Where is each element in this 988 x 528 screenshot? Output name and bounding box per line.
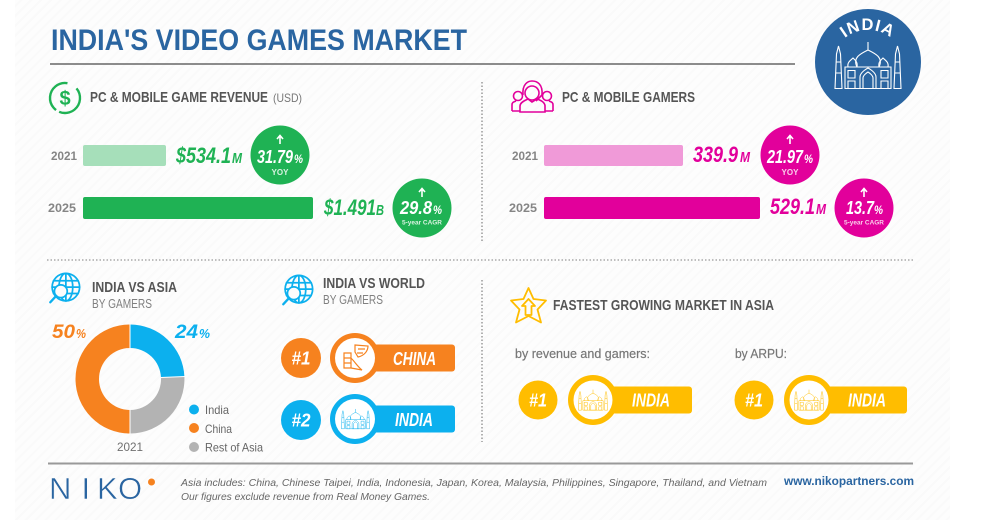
- footer: [49, 471, 914, 506]
- growth circle: 21.97% YoY: %: [804, 152, 813, 166]
- Asia heading: BY GAMERS: [92, 297, 152, 311]
- gamers heading: PC & MOBILE GAMERS: [562, 89, 695, 106]
- gamers 2025 row: M: [816, 201, 826, 218]
- growth circle: 13.7% CAGR: 13.7: [846, 198, 875, 218]
- gamers 2021 row: 2021: [512, 149, 538, 163]
- icon: Taj Mahal: [578, 390, 608, 410]
- growth circle: 31.79% YoY: [250, 126, 310, 184]
- revenue 2025 row: B: [376, 202, 384, 219]
- icon: Taj Mahal: [835, 42, 901, 88]
- rank: #1: #1: [292, 348, 310, 368]
- growth circle: 31.79% YoY: 31.79: [257, 147, 293, 167]
- revenue heading: (USD): [273, 91, 302, 105]
- revenue 2021 row: M: [232, 150, 242, 167]
- World heading: BY GAMERS: [323, 293, 383, 307]
- growth circle: 29.8% CAGR: 5-year CAGR: [402, 220, 442, 226]
- panel: fastest growing: [511, 288, 907, 425]
- logo: NIKO: [49, 471, 142, 506]
- subhead: ARPU: by ARPU:: [735, 346, 787, 361]
- revenue 2021 row: 2021: [51, 149, 77, 163]
- icon: globe: [50, 273, 80, 302]
- panel: India vs World: [281, 275, 455, 444]
- label: 24%: %: [199, 326, 210, 341]
- icon: gamers: [512, 81, 553, 112]
- rank: #1: [281, 338, 321, 378]
- pill: India by ARPU: INDIA: [848, 390, 886, 410]
- gamers 2021 row: [512, 142, 750, 167]
- legend: [189, 403, 263, 454]
- revenue 2021 row: [51, 143, 242, 168]
- donut chart: [75, 324, 185, 434]
- pill: India: [330, 394, 455, 444]
- pill: India by ARPU: [784, 375, 907, 425]
- growth circle: 13.7% CAGR: 5-year CAGR: [844, 220, 884, 226]
- subhead: revenue and gamers: by revenue and gamers:: [515, 346, 650, 361]
- growth circle: 21.97% YoY: [760, 126, 820, 184]
- donut year: 2021: [117, 440, 143, 454]
- badge: India: INDIA: [839, 18, 892, 38]
- label: 50%: 50: [52, 322, 75, 343]
- label: 50%: %: [76, 326, 86, 341]
- legend: China: [205, 422, 232, 436]
- gamers 2025 row: [509, 194, 826, 219]
- icon: globe: [283, 275, 313, 304]
- panel: gamers: [509, 81, 894, 238]
- rank: #1 by revenue: #1: [529, 390, 547, 410]
- revenue 2025 row: 2025: [48, 201, 76, 215]
- gamers 2025 row: 529.1: [770, 194, 815, 219]
- legend: Rest of Asia: [205, 440, 263, 454]
- growth circle: 21.97% YoY: 21.97: [766, 147, 804, 167]
- rank: #2: #2: [292, 410, 310, 430]
- gamers 2025 row: 2025: [509, 201, 537, 215]
- icon: dollar: $: [59, 88, 71, 110]
- rank: #1 by ARPU: [734, 380, 774, 420]
- revenue 2021 row: $534.1: [175, 143, 231, 168]
- footnote: Asia includes: China, Chinese Taipei, India, Indonesia, Japan, Korea, Malaysia, Philippines, Singapore, Thailand, and Vietnam: [180, 477, 767, 489]
- growth circle: 29.8% CAGR: [392, 178, 452, 238]
- gamers 2021 row: M: [740, 149, 750, 166]
- footnote: Our figures exclude revenue from Real Money Games.: [181, 491, 430, 503]
- panel: India vs Asia: [50, 273, 263, 454]
- footnote: [180, 477, 767, 503]
- Asia heading: INDIA VS ASIA: [92, 279, 177, 296]
- pill: China: CHINA: [393, 349, 436, 369]
- growth circle: 21.97% YoY: YOY: [782, 168, 799, 177]
- label: 24%: 24: [174, 322, 198, 343]
- growth circle: 13.7% CAGR: [834, 178, 894, 238]
- rank: #1 by ARPU: #1: [745, 390, 763, 410]
- panel: game revenue: [44, 77, 451, 237]
- growth circle: 29.8% CAGR: %: [433, 203, 442, 217]
- growth circle: 31.79% YoY: YOY: [272, 168, 289, 177]
- pill: India: INDIA: [395, 410, 433, 430]
- revenue 2025 row: $1.491: [323, 195, 376, 220]
- rank: #2: [281, 400, 321, 440]
- revenue 2025 row: [48, 195, 384, 220]
- growth circle: 29.8% CAGR: 29.8: [399, 198, 432, 218]
- label: 50%: [52, 322, 86, 343]
- icon: Great Wall: [344, 345, 368, 370]
- website: www.nikopartners.com: [783, 474, 914, 488]
- growth circle: 13.7% CAGR: %: [874, 203, 883, 217]
- badge: India: [815, 9, 921, 115]
- growth circle: 31.79% YoY: %: [294, 152, 303, 166]
- icon: Taj Mahal: [341, 409, 370, 429]
- Asia heading: [92, 279, 177, 311]
- World heading: INDIA VS WORLD: [323, 275, 425, 292]
- legend: India: [205, 403, 229, 417]
- gamers 2021 row: 339.9: [693, 142, 739, 167]
- pill: India by revenue: INDIA: [632, 390, 670, 410]
- revenue heading: PC & MOBILE GAME REVENUE: [90, 89, 268, 106]
- pill: China: [330, 333, 455, 383]
- icon: Taj Mahal: [794, 390, 824, 410]
- fastest heading: FASTEST GROWING MARKET IN ASIA: [553, 297, 774, 314]
- rank: #1 by revenue: [518, 380, 558, 420]
- pill: India by revenue: [568, 375, 692, 425]
- title: INDIA'S VIDEO GAMES MARKET: [51, 24, 467, 57]
- icon: dollar: [44, 77, 86, 119]
- World heading: [323, 275, 425, 307]
- icon: star: [511, 288, 546, 322]
- label: 24%: [174, 322, 210, 343]
